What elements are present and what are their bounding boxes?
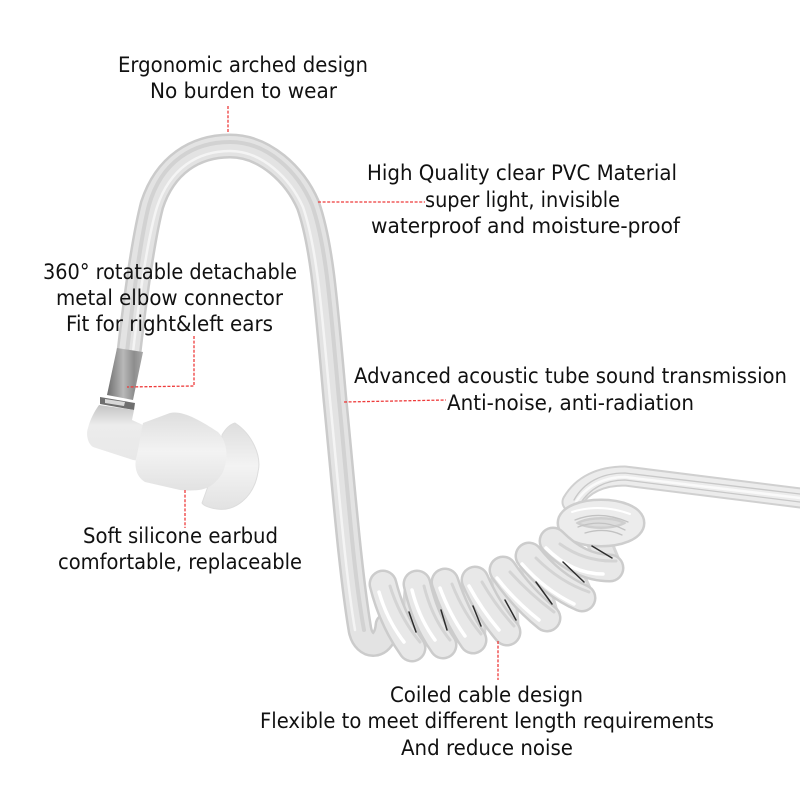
silicone elbow (87, 405, 148, 462)
clear arched tube (127, 142, 387, 644)
text: Fit for right&left ears (66, 312, 273, 336)
silicone earbud body (136, 412, 227, 490)
text (58, 524, 302, 574)
leader line (318, 201, 425, 203)
callout: metal elbow connector (43, 260, 297, 387)
callout: acoustic tube (344, 364, 787, 415)
text: super light, invisible (425, 188, 620, 212)
text: Anti-noise, anti-radiation (447, 391, 694, 415)
text (367, 161, 681, 238)
text: And reduce noise (401, 736, 573, 760)
text: 360° rotatable detachable (43, 260, 297, 284)
text (354, 364, 787, 415)
top coil ring (567, 508, 635, 537)
leader line (227, 106, 229, 132)
callout: arched design (118, 53, 368, 132)
text: No burden to wear (150, 79, 337, 103)
callout: coiled cable (260, 641, 714, 760)
text: Ergonomic arched design (118, 53, 368, 77)
text (260, 683, 714, 760)
text: Flexible to meet different length requirements (260, 709, 714, 733)
leader line (127, 336, 194, 387)
text: High Quality clear PVC Material (367, 161, 677, 185)
leader line (184, 490, 186, 528)
leader line (497, 641, 499, 680)
text: metal elbow connector (56, 286, 283, 310)
silicone earbud cap (202, 423, 259, 509)
callout: silicone earbud (58, 490, 302, 574)
text: comfortable, replaceable (58, 550, 302, 574)
metal elbow connector (100, 348, 143, 410)
text: waterproof and moisture-proof (371, 214, 681, 238)
text (118, 53, 368, 103)
text: Soft silicone earbud (83, 524, 278, 548)
coil front strands (379, 541, 616, 648)
product photo: acoustic tube earpiece (87, 142, 800, 648)
text (43, 260, 297, 336)
text: Coiled cable design (390, 683, 583, 707)
coiled cable tail (572, 473, 800, 504)
leader line (344, 400, 446, 402)
coil back strands (412, 520, 610, 648)
callout: PVC material (318, 161, 681, 238)
